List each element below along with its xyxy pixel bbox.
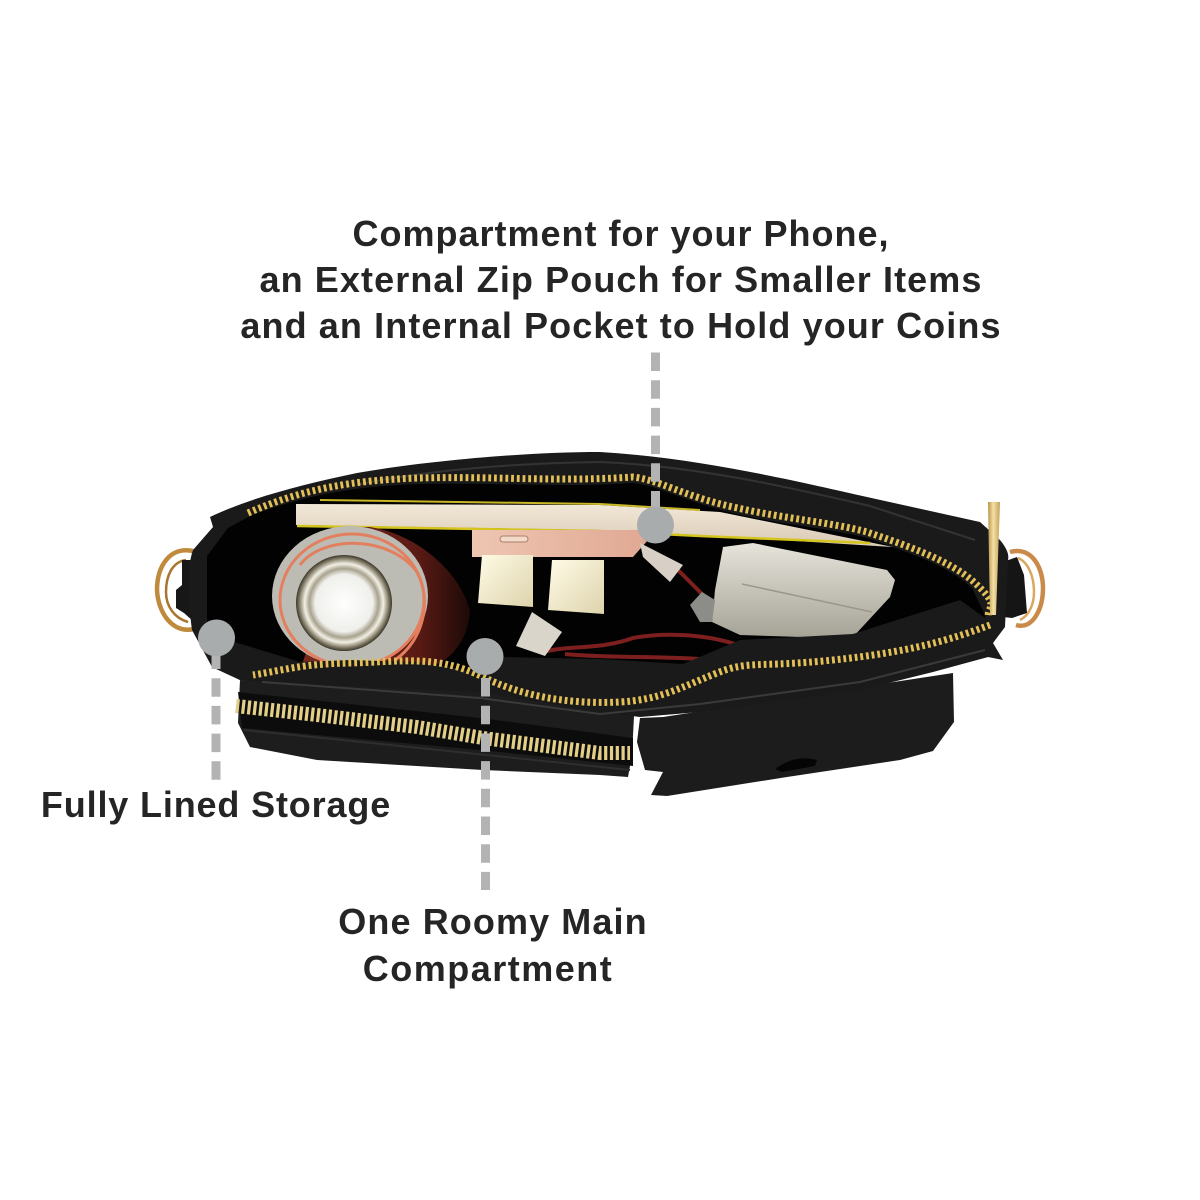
wall charger — [690, 543, 895, 638]
callout line: main compartment — [481, 678, 490, 890]
callout marker: phone compartment — [637, 506, 674, 544]
book — [296, 500, 893, 547]
callout line: phone compartment — [651, 352, 660, 523]
snap flap pocket — [637, 673, 954, 796]
top seam — [360, 462, 975, 540]
lower zipper — [253, 625, 990, 702]
label: main compartment: One Roomy Main — [338, 901, 648, 942]
bottle — [272, 526, 470, 670]
gold side bar — [988, 502, 1000, 615]
bottom seam — [262, 650, 985, 714]
right strap tab — [1000, 557, 1027, 618]
cable connector lower — [516, 612, 562, 656]
heading: phone compartment callout: and an Internal Pocket to Hold your Coins — [240, 305, 1002, 346]
heading: phone compartment callout: Compartment for your Phone, — [352, 213, 890, 254]
red cable — [543, 570, 735, 659]
phone — [472, 530, 648, 557]
left strap ring — [157, 550, 194, 630]
charging cube left — [478, 555, 533, 607]
front zip pouch — [238, 680, 634, 777]
lower lining — [205, 600, 993, 712]
upper zipper — [248, 477, 991, 617]
inner pocket zip — [920, 610, 963, 622]
left strap tab — [176, 560, 208, 622]
bag interior — [207, 483, 985, 700]
charging cube right — [548, 560, 604, 614]
callout line: lined storage — [212, 650, 220, 780]
pouch zipper — [236, 706, 630, 753]
callout marker: lined storage — [198, 620, 235, 656]
bag body — [188, 452, 1008, 717]
product illustration: open crossbody bag — [157, 452, 1043, 796]
heading: phone compartment callout: an External Zip Pouch for Smaller Items — [259, 259, 983, 300]
label: main compartment: Compartment — [363, 948, 613, 989]
right strap ring — [1010, 551, 1043, 626]
label: fully lined storage: Fully Lined Storage — [41, 784, 391, 825]
callout marker: main compartment — [466, 638, 504, 675]
cable connector upper — [640, 543, 683, 582]
label: main compartment — [338, 901, 648, 989]
heading: phone compartment callout — [240, 213, 1002, 346]
